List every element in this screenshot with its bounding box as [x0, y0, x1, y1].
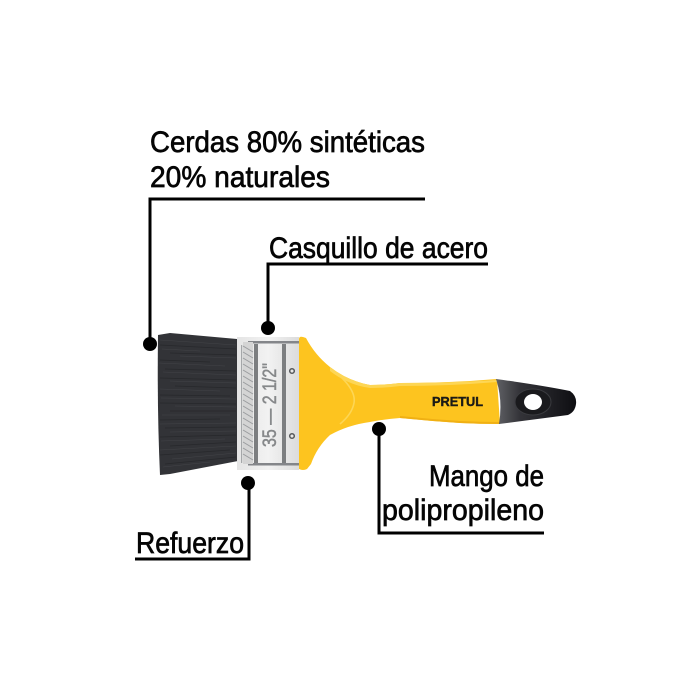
yellow handle: [299, 337, 500, 470]
callout: polypropylene handle: Mango de: [429, 460, 544, 493]
callout: bristles: [143, 126, 425, 351]
black handle tip: [496, 379, 576, 424]
callout: bristles: Cerdas 80% sintéticas: [150, 126, 425, 159]
brand logo: PRETUL: [432, 395, 483, 409]
ferrule size stamp: 35 — 2 1/2": [260, 363, 281, 447]
callout: polypropylene handle: polipropileno: [382, 494, 544, 527]
callout: steel ferrule: Casquillo de acero: [269, 232, 488, 265]
metal ferrule: [237, 337, 299, 470]
ferrule rivets: [290, 369, 294, 438]
bristles: [158, 333, 238, 475]
callout: polypropylene handle: [372, 422, 544, 533]
callout: reinforcement: Refuerzo: [136, 527, 244, 560]
hanging hole: [524, 394, 542, 410]
callout: bristles: 20% naturales: [150, 161, 330, 194]
callout: reinforcement: [135, 476, 255, 560]
paintbrush: [158, 333, 576, 475]
callout: steel ferrule: [261, 232, 488, 335]
